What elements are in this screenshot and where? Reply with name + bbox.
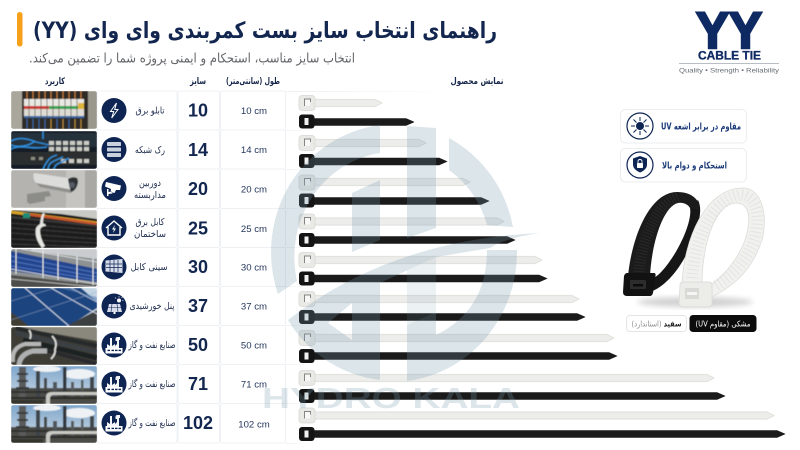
size numbers: 30: [188, 257, 208, 277]
length labels: 10 cm: [241, 106, 267, 117]
photo: solar panels: [11, 288, 97, 326]
application labels: تابلو برق: [136, 106, 165, 116]
size numbers: 10: [188, 100, 208, 120]
badge: strength and durability: [620, 148, 746, 182]
application labels: پنل خورشیدی: [130, 301, 175, 312]
icon: refinery (102): [102, 410, 126, 436]
icon: solar panel: [102, 294, 126, 318]
icon: server rack: [102, 137, 126, 162]
title: راهنمای انتخاب سایز بست کمربندی وای وای (YY): [33, 18, 497, 44]
photo: refinery (71): [11, 366, 97, 404]
length labels: 14 cm: [241, 145, 267, 156]
product ties: 71 cm: [299, 370, 725, 403]
table column headers: سایز: [189, 77, 206, 87]
table column headers: کاربرد: [45, 77, 66, 87]
photo: pipelines: [11, 327, 97, 365]
product ties: 37 cm: [299, 292, 585, 324]
application labels: ساختمان: [134, 229, 166, 240]
color pill: white standard: [626, 316, 686, 332]
size numbers: 25: [188, 218, 208, 238]
photo: security camera: [11, 170, 97, 208]
product ties: 30 cm: [299, 252, 547, 286]
length labels: 37 cm: [241, 302, 267, 312]
application labels: رک شبکه: [135, 145, 165, 156]
application labels: صنایع نفت و گاز: [128, 339, 176, 351]
color pill: black UV resistant: مشکی (مقاوم UV): [696, 320, 750, 328]
size numbers: [183, 100, 213, 433]
table column headers: [45, 77, 504, 87]
icon: cctv: [102, 176, 126, 201]
badge: UV resistant: [620, 110, 746, 143]
length labels: 102 cm: [238, 420, 270, 430]
product ties: 20 cm: [299, 175, 489, 208]
product ties: 14 cm: [299, 136, 447, 168]
size numbers: 102: [183, 413, 213, 433]
size numbers: 37: [188, 296, 208, 316]
logo: YY cable tie: CABLE TIE: [698, 50, 761, 62]
length labels: 25 cm: [241, 224, 267, 235]
length labels: 30 cm: [241, 262, 267, 274]
product photo: black and white cable ties: [623, 188, 764, 307]
icon: refinery (50): [102, 332, 126, 358]
watermark: hydro kala logo: [262, 125, 540, 415]
table column headers: طول (سانتی‌متر): [226, 77, 280, 87]
subtitle: انتخاب سایز مناسب، استحکام و ایمنی پروژه شما را تضمین می‌کند.: [29, 52, 355, 66]
icon: cable tray: [102, 254, 126, 280]
icon: refinery (71): [102, 372, 126, 396]
product ties: 50 cm: [299, 330, 617, 363]
length labels: 20 cm: [241, 184, 267, 196]
badge: UV resistant: مقاوم در برابر اشعه UV: [661, 122, 741, 132]
application labels: دوربین: [139, 178, 161, 189]
size numbers: 14: [188, 140, 208, 160]
size numbers: 71: [188, 374, 208, 394]
logo: YY cable tie: [679, 2, 779, 74]
application labels: کابل برق: [136, 217, 165, 228]
icon: lightning: [102, 98, 126, 123]
photo: refinery (102): [11, 405, 97, 443]
photo: network rack: [11, 131, 97, 169]
color pill: black UV resistant: [690, 315, 756, 332]
application labels: صنایع نفت و گاز: [128, 417, 176, 429]
photo: building cables: [11, 210, 97, 248]
photo: electrical panel: [11, 91, 97, 129]
application labels: صنایع نفت و گاز: [128, 378, 176, 390]
watermark: hydro kala logo: HYDRO KALA: [262, 383, 520, 415]
logo: YY cable tie: Quality • Strength • Reliability: [679, 68, 779, 74]
photo: cable tray: [11, 249, 97, 287]
product ties: 102 cm: [299, 408, 785, 441]
length labels: [238, 106, 270, 430]
color pill: white standard: سفید (استاندارد): [632, 320, 682, 328]
length labels: 71 cm: [241, 380, 267, 390]
logo: YY cable tie: YY: [696, 2, 762, 59]
table column headers: نمایش محصول: [450, 77, 504, 87]
header accent bar: [17, 12, 22, 46]
product ties: 10 cm: [299, 96, 414, 128]
product ties: 25 cm: [299, 214, 515, 247]
size numbers: 20: [188, 179, 208, 199]
length labels: 50 cm: [241, 340, 267, 352]
application labels: مداربسته: [134, 190, 166, 201]
size numbers: 50: [188, 335, 208, 355]
application labels: [128, 106, 176, 429]
badge: strength and durability: استحکام و دوام بالا: [662, 160, 727, 172]
table cell grid: [97, 91, 456, 444]
application labels: سینی کابل: [130, 262, 168, 273]
icon: house with bolt: [102, 216, 126, 240]
